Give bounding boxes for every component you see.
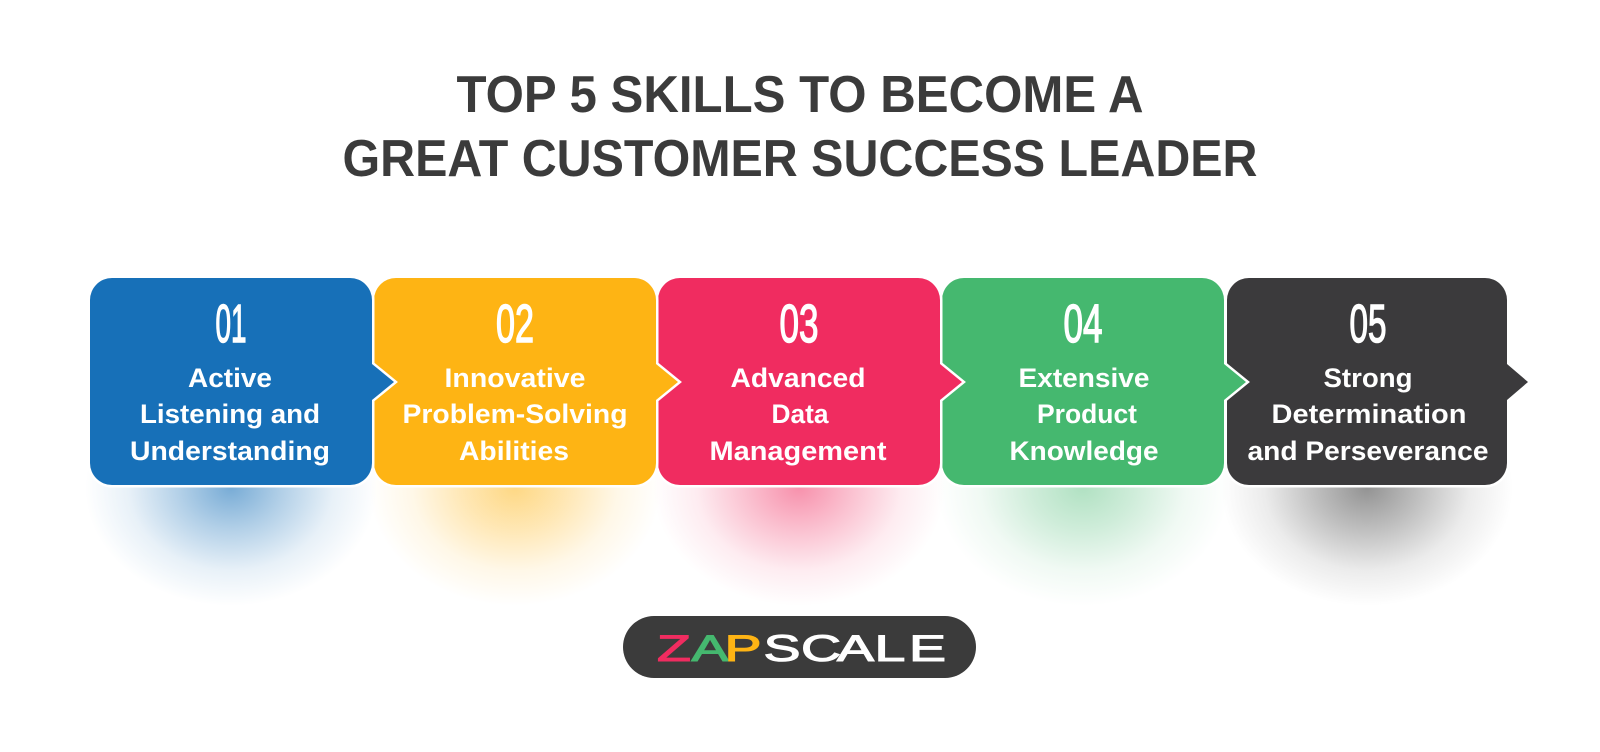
panel: skill 04: Product bbox=[1037, 399, 1137, 429]
panel: skill 02: Problem-Solving bbox=[402, 399, 628, 429]
panel: skill 02 bbox=[374, 278, 678, 485]
panel: skill 02: Innovative bbox=[444, 363, 586, 393]
panel: skill 05: Strong bbox=[1324, 363, 1412, 393]
panel: skill 04: Extensive bbox=[1018, 363, 1150, 393]
panel: skill 04: 04 bbox=[1064, 294, 1102, 354]
panel: skill 03: Management bbox=[710, 436, 886, 466]
title: TOP 5 SKILLS TO BECOME A bbox=[456, 66, 1144, 124]
panel: skill 04: Knowledge bbox=[1010, 436, 1158, 466]
panel: skill 05: Determination bbox=[1272, 399, 1466, 429]
panel: skill 02: Abilities bbox=[459, 436, 569, 466]
panel: skill 01: Listening and bbox=[140, 399, 320, 429]
panel: skill 03: Advanced bbox=[730, 363, 866, 393]
logo: ZapScale pill bbox=[623, 616, 976, 678]
panel: skill 01: Active bbox=[188, 363, 272, 393]
panel: skill 01 bbox=[90, 278, 394, 485]
panel: skill 01: 01 bbox=[216, 294, 246, 354]
panel: skill 05: and Perseverance bbox=[1248, 436, 1488, 466]
logo: ZapScale pill: ZAPSCALE bbox=[657, 627, 946, 669]
panel: skill 03 bbox=[658, 278, 962, 485]
panel: skill 05 bbox=[1227, 278, 1528, 485]
glow shadows beneath cards bbox=[85, 370, 1513, 606]
panel: skill 04 bbox=[942, 278, 1246, 485]
panel: skill 03: Data bbox=[772, 399, 829, 429]
title: GREAT CUSTOMER SUCCESS LEADER bbox=[342, 130, 1258, 188]
panel: skill 03: 03 bbox=[780, 294, 818, 354]
panel: skill 01: Understanding bbox=[130, 436, 330, 466]
panel: skill 05: 05 bbox=[1350, 294, 1386, 354]
title bbox=[342, 66, 1258, 188]
panel: skill 02: 02 bbox=[496, 294, 534, 354]
